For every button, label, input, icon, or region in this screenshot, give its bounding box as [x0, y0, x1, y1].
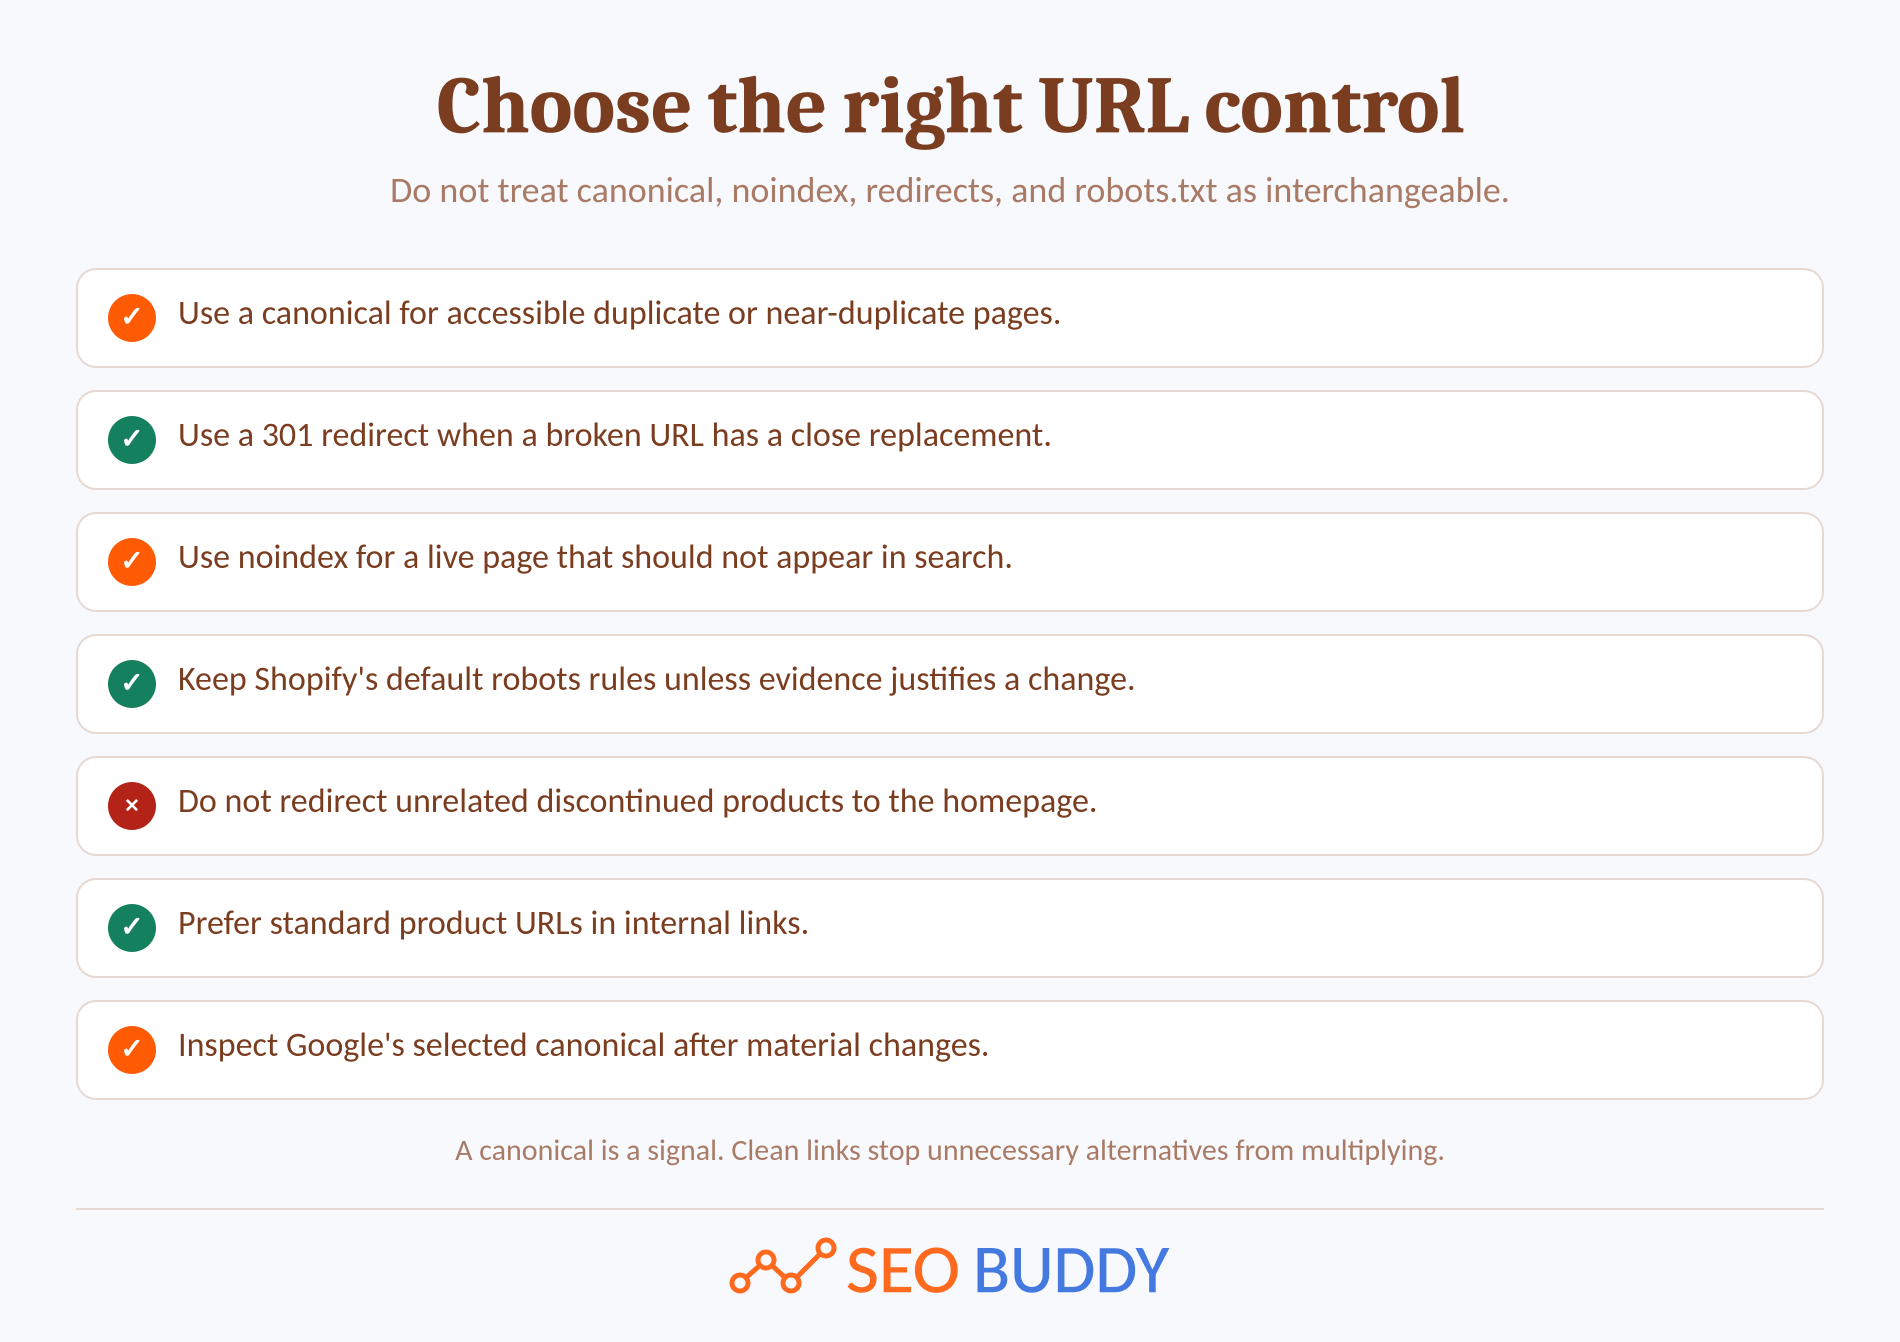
logo: SEO Buddy [730, 1230, 1170, 1310]
footnote: A canonical is a signal. Clean links stop unnecessary alternatives from multiplying. [455, 1132, 1445, 1169]
card: robots rules: ✓ [120, 665, 144, 700]
card: canonical: Use a canonical for accessible duplicate or near-duplicate pages. [178, 293, 1061, 334]
card: inspect canonical: ✓ [120, 1031, 144, 1066]
card: noindex [76, 512, 1824, 612]
title: Choose the right URL control [437, 60, 1465, 152]
card: canonical [76, 268, 1824, 368]
card: do not redirect [76, 756, 1824, 856]
card: robots rules: Keep Shopify's default robots rules unless evidence justifies a change. [178, 659, 1136, 700]
card: 301 redirect: Use a 301 redirect when a broken URL has a close replacement. [178, 415, 1052, 456]
card: do not redirect: Do not redirect unrelated discontinued products to the homepage. [178, 781, 1098, 822]
card: do not redirect: ✕ [124, 795, 140, 818]
card: standard product URLs [76, 878, 1824, 978]
card: standard product URLs: ✓ [120, 909, 144, 944]
card: noindex: ✓ [120, 543, 144, 578]
icon: trend line [732, 1240, 834, 1291]
card: standard product URLs: Prefer standard product URLs in internal links. [178, 903, 809, 944]
card: noindex: Use noindex for a live page that should not appear in search. [178, 537, 1013, 578]
subtitle: Do not treat canonical, noindex, redirects, and robots.txt as interchangeable. [390, 168, 1510, 212]
card: 301 redirect: ✓ [120, 421, 144, 456]
logo wordmark [846, 1228, 1170, 1311]
card: inspect canonical: Inspect Google's selected canonical after material changes. [178, 1025, 990, 1066]
card: 301 redirect [76, 390, 1824, 490]
card: inspect canonical [76, 1000, 1824, 1100]
card: canonical: ✓ [120, 299, 144, 334]
card: robots rules [76, 634, 1824, 734]
